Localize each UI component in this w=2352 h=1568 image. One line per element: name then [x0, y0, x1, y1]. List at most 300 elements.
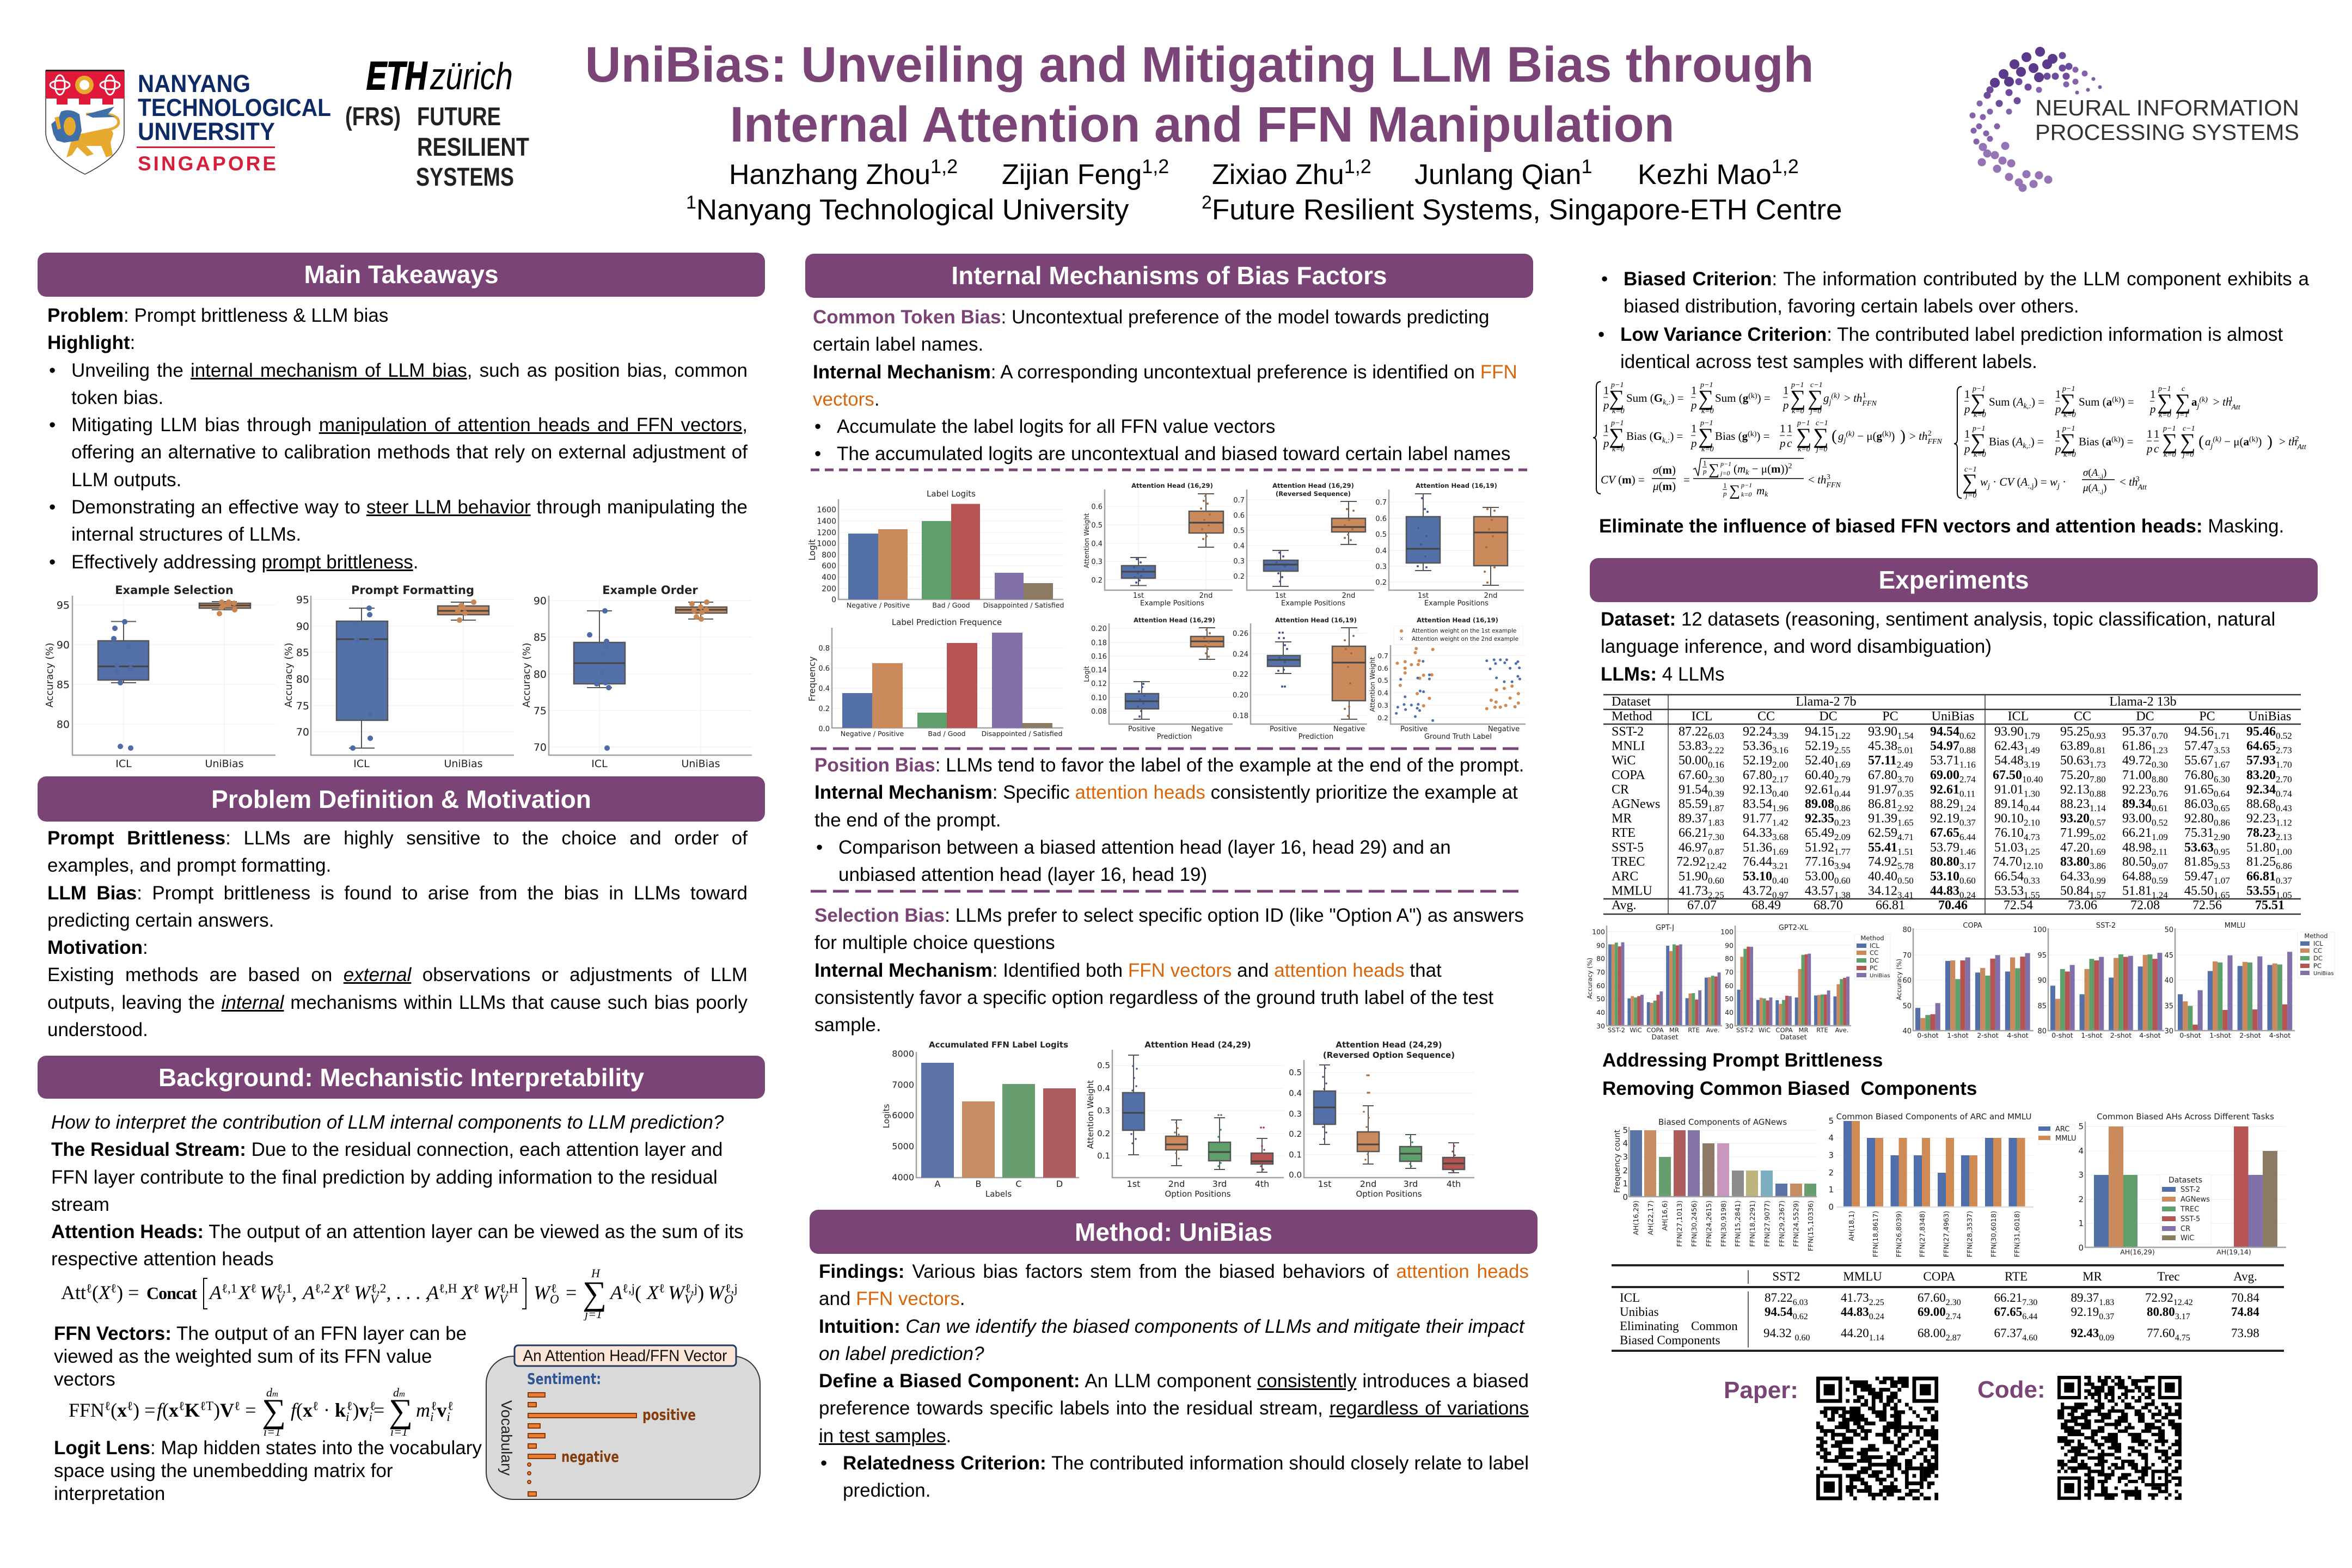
table: accuracy across datasets and methods: 1.65 [2214, 890, 2230, 901]
affiliations: 1 [686, 192, 696, 213]
table: removing common biased components: 4.75 [2175, 1333, 2190, 1343]
chart: Biased Components of AGNews: FFN(30,2456) [1690, 1200, 1698, 1247]
chart: Attention Head (16,19) prediction: 0.20 [1233, 691, 1248, 700]
diagram: attention head / FFN vector vocabulary bars: negative [561, 1448, 619, 1466]
equations: FFN vector criteria: 1 [1703, 459, 1706, 467]
legend: method colors, shots charts: DC [2313, 954, 2323, 962]
legend: method colors, shots charts: PC [2313, 962, 2322, 970]
equations: FFN vector criteria: > th [1909, 430, 1927, 443]
table: removing common biased components: 73.98 [2231, 1326, 2259, 1340]
chart: GPT2-XL accuracy bars: 50 [1725, 995, 1734, 1003]
table: accuracy across datasets and methods: COPA [1612, 768, 1645, 782]
table: accuracy across datasets and methods: 68.70 [1814, 898, 1843, 912]
chart: Common Biased Components of ARC and MMLU: FFN(27,4963) [1942, 1211, 1950, 1257]
diagram: attention head / FFN vector vocabulary bars: Sentiment: [527, 1370, 601, 1388]
equations: attention head criteria: j=1 [2176, 411, 2188, 419]
table: accuracy across datasets and methods: 62.43 [1994, 739, 2024, 754]
table: accuracy across datasets and methods: 3.17 [1959, 861, 1976, 871]
chart: Accumulated FFN Label Logits [881, 1040, 1079, 1199]
table: accuracy across datasets and methods: 95.37 [2122, 725, 2152, 739]
table: accuracy across datasets and methods: 50.00 [1679, 754, 1708, 768]
equation: attention layer decomposition: Att [61, 1282, 86, 1303]
table: accuracy across datasets and methods [1603, 695, 2301, 914]
chart: COPA shots bars: Accuracy (%) [1895, 959, 1903, 1000]
equation: attention layer decomposition: ℓ,H [500, 1282, 518, 1295]
table: removing common biased components: 0.09 [2099, 1333, 2114, 1343]
chart: Attention Head (16,19) example positions: Example Positions [1424, 599, 1489, 608]
table: accuracy across datasets and methods: 89.37 [1679, 811, 1708, 825]
chart: Common Biased Components of ARC and MMLU: 3 [1828, 1150, 1834, 1160]
equations: attention head criteria: w [2050, 475, 2057, 488]
chart: Accumulated FFN Label Logits: 8000 [892, 1049, 914, 1059]
text block: problem definition: predicting certain answers. [47, 910, 274, 931]
equations: FFN vector criteria: j [1842, 437, 1846, 445]
chart: GPT2-XL accuracy bars: Ave. [1835, 1026, 1848, 1034]
equations: attention head criteria: ∑ [2060, 389, 2076, 414]
chart: Label Prediction Frequence bars: Negative / Positive [841, 730, 904, 738]
chart: Attention Head (24,29) option positions: 3rd [1212, 1179, 1227, 1189]
equations: FFN vector criteria: p−1 [1791, 381, 1804, 389]
chart: Prompt Formatting boxplot: Prompt Formatting [351, 584, 474, 597]
icon: NeurIPS dot arc [1973, 52, 2100, 188]
table: accuracy across datasets and methods: 64.33 [1743, 826, 1772, 840]
chart: Accumulated FFN Label Logits: A [935, 1179, 941, 1189]
logo: Nanyang Technological University: NANYANG [138, 70, 250, 97]
table: accuracy across datasets and methods: 80.50 [2122, 855, 2152, 869]
chart: Label Logits bars: 1400 [817, 517, 836, 526]
chart: Attention Head (16,29) prediction logit: 0.16 [1091, 653, 1107, 661]
equations: FFN vector criteria: m [1756, 484, 1765, 497]
table: accuracy across datasets and methods: 0.59 [2152, 875, 2168, 886]
authors: 1 [1581, 155, 1592, 177]
table: accuracy across datasets and methods: 1.70 [2276, 759, 2292, 770]
table: accuracy across datasets and methods: 40.40 [1868, 869, 1897, 884]
table: accuracy across datasets and methods: 75.20 [2060, 768, 2090, 782]
chart: MMLU shots bars: 45 [2164, 952, 2173, 960]
chart: Attention Head (24,29) reversed option sequence: 3rd [1404, 1179, 1418, 1189]
table: accuracy across datasets and methods: 53.53 [1994, 884, 2024, 898]
chart: MMLU shots bars: 50 [2164, 926, 2173, 934]
logo: Nanyang Technological University: SINGAPORE [138, 152, 276, 175]
chart: Attention Head (16,29) prediction logit: Negative [1191, 725, 1223, 733]
chart: Label Prediction Frequence bars [807, 617, 1063, 738]
chart: Attention Head (16,29) reversed sequence: 1st [1275, 592, 1286, 600]
chart: Attention Head (24,29) option positions: 4th [1255, 1179, 1269, 1189]
text block: takeaways [47, 305, 748, 573]
text block: method findings and criteria: preference towards specific labels into the residual stream, regardless of variations [819, 1398, 1529, 1419]
equation: attention layer decomposition [61, 1266, 738, 1321]
chart: Attention Head (16,19) prediction: 0.22 [1233, 671, 1248, 679]
table: accuracy across datasets and methods: 51.03 [1994, 841, 2024, 855]
equations: FFN vector criteria: j=0 [1719, 469, 1730, 477]
table: accuracy across datasets and methods: 1.23 [2152, 745, 2168, 756]
table: accuracy across datasets and methods: 72.56 [2192, 898, 2222, 912]
equations: FFN vector criteria: ) [1891, 430, 1895, 443]
chart: Attention Head (16,19) example positions: 1st [1418, 592, 1429, 600]
table: accuracy across datasets and methods: 72.54 [2004, 898, 2033, 912]
equations: attention head criteria: Sum (A [1989, 395, 2024, 408]
legend: method colors, shots charts: CC [2313, 947, 2322, 954]
chart: GPT2-XL accuracy bars: RTE [1816, 1026, 1828, 1034]
chart: GPT-J accuracy bars: 40 [1596, 1008, 1605, 1016]
table: accuracy across datasets and methods: 2.17 [1772, 774, 1788, 785]
chart: COPA shots bars: 1-shot [1947, 1031, 1969, 1039]
chart: Attention Head (16,19) ground truth scatter: 0.5 [1377, 676, 1388, 684]
table: removing common biased components: 44.20 [1841, 1326, 1869, 1340]
chart: MMLU shots bars: 30 [2164, 1027, 2173, 1036]
equations: FFN vector criteria: 1 [1780, 422, 1786, 435]
text block: selection bias [814, 905, 1524, 1036]
equation: attention layer decomposition: j=1 [583, 1307, 602, 1321]
authors [729, 155, 1799, 191]
chart: Biased Components of AGNews: 5 [1622, 1125, 1628, 1135]
table: accuracy across datasets and methods: 67.80 [1868, 768, 1897, 782]
authors: Hanzhang Zhou [729, 159, 930, 191]
table: accuracy across datasets and methods: 53.10 [1930, 869, 1959, 884]
chart: Attention Head (16,29) prediction logit: 0.10 [1091, 694, 1107, 702]
chart: Biased Components of AGNews: FFN(27,9077) [1763, 1200, 1771, 1247]
equations: FFN vector criteria: ) = [1670, 391, 1684, 405]
chart: Attention Head (24,29) option positions: 0.3 [1097, 1106, 1110, 1116]
text block: position bias: unbiased attention head (layer 16, head 19) [838, 864, 1207, 885]
equations: FFN vector criteria: CV (m) = [1601, 473, 1645, 486]
equations: FFN vector criteria: = [1683, 473, 1690, 486]
equation: attention layer decomposition: ℓ,1 [222, 1282, 237, 1295]
equations: attention head criteria: ) = [2031, 435, 2044, 448]
chart: Prompt Formatting boxplot [283, 584, 514, 770]
equations: FFN vector criteria: k,: [1663, 399, 1670, 407]
equation: FFN layer decomposition: dm [393, 1386, 405, 1399]
equations: FFN vector criteria [1593, 381, 1943, 499]
table: removing common biased components: 44.83 [1841, 1305, 1869, 1319]
table: removing common biased components: MMLU [1843, 1270, 1882, 1283]
equation: attention layer decomposition: ∑ [583, 1275, 607, 1312]
table: accuracy across datasets and methods: 68.49 [1751, 898, 1781, 912]
chart: GPT2-XL accuracy bars: WiC [1759, 1026, 1771, 1034]
equation: FFN layer decomposition: K [185, 1399, 200, 1421]
chart: Attention Head (16,29) example positions: Attention Head (16,29) [1131, 482, 1213, 489]
chart: Example Selection boxplot: Example Selection [115, 584, 234, 597]
equations: attention head criteria: Bias (A [1989, 435, 2023, 448]
table: accuracy across datasets and methods: 93.00 [2122, 811, 2152, 825]
table: accuracy across datasets and methods: 1.83 [1708, 818, 1724, 828]
table: accuracy across datasets and methods: 0.81 [2090, 745, 2106, 756]
text block: position bias [814, 755, 1524, 885]
text block: residual stream and attention heads: The Residual Stream: Due to the residual connection, each attention layer and [51, 1139, 722, 1160]
chart: SST-2 shots bars: 80 [2037, 1027, 2047, 1036]
equations: FFN vector criteria: (k) [1748, 392, 1757, 400]
chart: GPT-J accuracy bars: COPA [1646, 1026, 1664, 1034]
table: accuracy across datasets and methods: 83.80 [2060, 855, 2090, 869]
chart: SST-2 shots bars: 85 [2037, 1002, 2047, 1010]
equation: attention layer decomposition: O [724, 1293, 733, 1306]
equations: attention head criteria: Att [2231, 403, 2241, 412]
equations: FFN vector criteria: j [1828, 399, 1832, 407]
table: accuracy across datasets and methods: 1.49 [2024, 745, 2040, 756]
table: accuracy across datasets and methods: 92.13 [1743, 783, 1772, 797]
table: accuracy across datasets and methods: 0.52 [2276, 731, 2292, 741]
chart: Attention Head (16,19) example positions: Attention Head (16,19) [1416, 482, 1497, 489]
text block: residual stream and attention heads: stream [51, 1194, 109, 1215]
heading: Experiments [1590, 558, 2318, 602]
table: accuracy across datasets and methods: 2.92 [1897, 803, 1914, 813]
chart: GPT2-XL accuracy bars: 40 [1725, 1008, 1734, 1016]
chart: Attention Head (16,29) reversed sequence: 0.5 [1233, 527, 1245, 535]
chart: Example Order boxplot: 80 [534, 669, 547, 681]
chart: GPT2-XL accuracy bars: 100 [1720, 928, 1734, 936]
text block: problem definition: outputs, leaving the internal mechanisms within LLMs that cause such bias poorly [47, 992, 748, 1013]
equations: attention head criteria: p−1 [2158, 385, 2171, 393]
table: accuracy across datasets and methods: 0.44 [1834, 788, 1851, 799]
chart: GPT2-XL accuracy bars: 70 [1725, 968, 1734, 976]
chart: Attention Head (16,29) prediction logit: Attention Head (16,29) [1134, 616, 1215, 624]
table: accuracy across datasets and methods: UniBias [1932, 709, 1974, 724]
chart: Accumulated FFN Label Logits: 7000 [892, 1080, 914, 1090]
table: accuracy across datasets and methods: 1.25 [2024, 847, 2040, 857]
equation: attention layer decomposition: , . . . , [386, 1282, 430, 1303]
heading: Background [38, 1056, 765, 1099]
table: removing common biased components: Common [1691, 1319, 1738, 1333]
table: accuracy across datasets and methods: 1.87 [1708, 803, 1724, 813]
table: accuracy across datasets and methods: 6.03 [1708, 731, 1724, 741]
text block: common token bias: The accumulated logits are uncontextual and biased toward certain label names [837, 443, 1510, 464]
equations: FFN vector criteria: k [1765, 491, 1768, 499]
table: accuracy across datasets and methods: 46.97 [1679, 841, 1708, 855]
diagram: attention head / FFN vector vocabulary bars: positive [642, 1406, 696, 1424]
text block: takeaways: token bias. [71, 387, 163, 408]
equations: attention head criteria: p−1 [2062, 425, 2075, 433]
equation: attention layer decomposition: ) = [117, 1282, 139, 1303]
table: accuracy across datasets and methods: 91.77 [1743, 811, 1772, 825]
equations: attention head criteria: ∑ [2175, 389, 2191, 414]
equations: FFN vector criteria: 1 [1603, 384, 1609, 397]
table: accuracy across datasets and methods: 1.71 [2214, 731, 2230, 741]
equations: attention head criteria: j [1987, 482, 1990, 491]
table: accuracy across datasets and methods: 1.77 [1834, 847, 1851, 857]
chart: GPT2-XL accuracy bars: 60 [1725, 982, 1734, 990]
chart: GPT2-XL accuracy bars: 80 [1725, 954, 1734, 963]
equations: FFN vector criteria: k=0 [1741, 491, 1751, 498]
table: accuracy across datasets and methods: 76.80 [2184, 768, 2214, 782]
equation: FFN layer decomposition: i [369, 1410, 372, 1424]
equation: FFN layer decomposition: = [240, 1399, 256, 1421]
table: removing common biased components: COPA [1923, 1270, 1956, 1283]
chart: Attention Head (24,29) option positions: Option Positions [1165, 1189, 1231, 1199]
text block: method findings and criteria: in test samples. [819, 1425, 951, 1447]
affiliations: Nanyang Technological University [696, 194, 1129, 226]
equations: FFN vector criteria: FFN [1927, 438, 1943, 446]
table: accuracy across datasets and methods: 0.86 [1834, 803, 1851, 813]
table: accuracy across datasets and methods: 92.23 [2122, 783, 2152, 797]
chart: Attention Head (16,19) example positions: 2nd [1484, 592, 1497, 600]
equations: FFN vector criteria: ∑ [1808, 385, 1823, 410]
chart: Common Biased Components of ARC and MMLU: 4 [1828, 1133, 1834, 1143]
table: removing common biased components: 80.80 [2147, 1305, 2175, 1319]
table: accuracy across datasets and methods: 66.54 [1994, 869, 2024, 884]
text block: common token bias: certain label names. [813, 334, 983, 355]
logo: Neural Information Processing Systems: NEURAL INFORMATION [2035, 95, 2299, 120]
heading: Addressing Prompt Brittleness: Addressing Prompt Brittleness [1602, 1050, 1883, 1071]
table: removing common biased components: 12.42 [2173, 1298, 2193, 1307]
heading: Internal Mechanisms of Bias Factors [805, 254, 1533, 298]
equation: FFN layer decomposition [69, 1386, 454, 1438]
table: accuracy across datasets and methods: 92.13 [2060, 783, 2090, 797]
heading: Main Takeaways: Main Takeaways [304, 260, 499, 289]
equation: FFN layer decomposition: i=1 [264, 1425, 281, 1438]
chart: GPT2-XL accuracy bars: COPA [1775, 1026, 1793, 1034]
chart: Attention Head (16,29) example positions: 0.3 [1091, 558, 1102, 566]
equations: attention head criteria: k=0 [2063, 451, 2076, 459]
chart: Example Selection boxplot: 85 [57, 679, 70, 691]
heading: Method: Method: UniBias [1075, 1218, 1272, 1246]
equation: FFN layer decomposition: v [437, 1399, 446, 1421]
chart: Label Prediction Frequence bars: Label Prediction Frequence [892, 617, 1002, 627]
chart: Label Logits bars: 400 [822, 573, 836, 582]
equation: attention layer decomposition: ℓ,H [439, 1282, 457, 1295]
table: accuracy across datasets and methods: 4.71 [1897, 832, 1914, 842]
table: removing common biased components: ICL [1620, 1291, 1640, 1304]
equation: FFN layer decomposition: FFN [69, 1399, 105, 1421]
chart: Attention Head (16,29) reversed sequence: 2nd [1342, 592, 1355, 600]
text block: problem definition: Existing methods are based on external observations or adjustments of LLM [47, 964, 748, 985]
equations: attention head criteria: (k) [2249, 436, 2258, 444]
chart: Example Selection boxplot [44, 584, 275, 770]
chart: Common Biased Components of ARC and MMLU: Common Biased Components of ARC and MMLU [1836, 1112, 2031, 1122]
table: accuracy across datasets and methods: 2.73 [2276, 745, 2292, 756]
table: accuracy across datasets and methods: 92.80 [2184, 811, 2214, 825]
table: accuracy across datasets and methods: 91.01 [1994, 783, 2024, 797]
equation: FFN layer decomposition: ℓ [313, 1399, 318, 1413]
equations: FFN vector criteria: p [1782, 399, 1789, 412]
equations: attention head criteria: c−1 [1964, 465, 1977, 474]
table: accuracy across datasets and methods: 1.16 [1959, 759, 1976, 770]
table: accuracy across datasets and methods: 34.12 [1868, 884, 1897, 898]
table: accuracy across datasets and methods: 0.60 [1959, 875, 1976, 886]
equations: attention head criteria: Att [2137, 483, 2147, 492]
chart: Label Logits bars: 1600 [817, 506, 836, 514]
text block: takeaways: Problem: Prompt brittleness & LLM bias [47, 305, 388, 326]
table: accuracy across datasets and methods: 53.79 [1930, 841, 1959, 855]
equations: FFN vector criteria: (k) [1846, 430, 1854, 438]
text block: problem definition [47, 828, 748, 1040]
table: accuracy across datasets and methods: 2.55 [1834, 745, 1851, 756]
authors: 1,2 [1772, 155, 1799, 177]
chart: Attention Head (24,29) reversed option sequence: 0.3 [1289, 1109, 1302, 1119]
table: accuracy across datasets and methods: 94.15 [1805, 725, 1834, 739]
equations: attention head criteria: k=0 [1974, 451, 1986, 459]
table: accuracy across datasets and methods: 2.90 [2214, 832, 2230, 842]
table: accuracy across datasets and methods: 48.98 [2122, 841, 2152, 855]
chart: GPT2-XL accuracy bars: 90 [1725, 941, 1734, 950]
equation: attention layer decomposition: ℓ [344, 1282, 350, 1295]
equations: attention head criteria [1954, 385, 2307, 500]
table: accuracy across datasets and methods: 91.97 [1868, 783, 1897, 797]
chart: GPT2-XL accuracy bars: SST-2 [1736, 1026, 1754, 1034]
equations: attention head criteria: ) [2267, 432, 2273, 450]
equations: attention head criteria: c [2182, 385, 2185, 393]
table: accuracy across datasets and methods: 0.64 [2214, 788, 2230, 799]
table: accuracy across datasets and methods: 1.73 [2090, 759, 2106, 770]
chart: Common Biased Components of ARC and MMLU: 2 [1828, 1168, 1834, 1178]
chart: Attention Head (24,29) reversed option sequence: 4th [1447, 1179, 1461, 1189]
chart: Attention Head (24,29) reversed option sequence: 0.4 [1289, 1088, 1302, 1098]
text block: position bias: Comparison between a biased attention head (layer 16, head 29) and an [838, 837, 1451, 858]
dashed divider three [811, 890, 1524, 893]
table: accuracy across datasets and methods: 0.60 [1708, 875, 1724, 886]
text block: problem definition: Prompt Brittleness: LLMs are highly sensitive to the choice and order of [47, 828, 748, 849]
chart: Attention Head (16,19) prediction: 0.24 [1233, 651, 1248, 659]
chart: Attention Head (16,29) reversed sequence [1233, 482, 1374, 608]
table: accuracy across datasets and methods: 91.65 [2184, 783, 2214, 797]
table: accuracy across datasets and methods: 1.69 [1834, 759, 1851, 770]
text block: datasets and LLMs: Dataset: 12 datasets (reasoning, sentiment analysis, topic classification, natural [1601, 609, 2275, 630]
table: accuracy across datasets and methods: 89.34 [2122, 797, 2152, 811]
chart: Attention Head (16,19) example positions: 0.2 [1375, 579, 1387, 587]
equation: attention layer decomposition: V [276, 1293, 285, 1306]
equations: attention head criteria: a [2205, 435, 2210, 448]
chart: Attention Head (16,19) prediction: 0.26 [1233, 630, 1248, 638]
table: accuracy across datasets and methods: 0.44 [2024, 803, 2040, 813]
chart: Example Selection boxplot: 90 [57, 639, 70, 651]
equations: FFN vector criteria: Bias (g [1715, 430, 1748, 443]
chart: Attention Head (24,29) reversed option sequence: 1st [1318, 1179, 1331, 1189]
text block: biased criterion: Biased Criterion: The information contributed by the LLM component exhibits a [1624, 268, 2309, 290]
equation: attention layer decomposition: W [354, 1282, 372, 1303]
table: accuracy across datasets and methods: 9.53 [2214, 861, 2230, 871]
text block: low variance criterion: identical across test samples with different labels. [1620, 351, 2037, 372]
table: removing common biased components: SST2 [1772, 1270, 1800, 1283]
table: accuracy across datasets and methods: 76.10 [1994, 826, 2024, 840]
table: accuracy across datasets and methods: 6.86 [2276, 861, 2292, 871]
table: accuracy across datasets and methods: 71.99 [2060, 826, 2090, 840]
table: accuracy across datasets and methods: 0.60 [1834, 875, 1851, 886]
equations: attention head criteria: p [1963, 402, 1970, 415]
table: accuracy across datasets and methods: Avg. [1612, 898, 1637, 912]
chart: SST-2 shots bars [2033, 922, 2164, 1039]
equation: FFN layer decomposition: ℓ [431, 1399, 437, 1413]
text block: datasets and LLMs [1601, 606, 2310, 688]
chart: Label Logits bars: 600 [822, 562, 836, 571]
table: accuracy across datasets and methods: SST-5 [1612, 841, 1644, 855]
chart: Accumulated FFN Label Logits: C [1015, 1179, 1022, 1189]
heading: Problem Definition & Motivation: Problem Definition & Motivation [211, 785, 591, 813]
equations: attention head criteria: p−1 [2163, 425, 2176, 433]
table: accuracy across datasets and methods: 0.97 [1772, 890, 1788, 901]
equation: FFN layer decomposition: v [359, 1399, 369, 1421]
chart: Example Selection boxplot: UniBias [205, 758, 244, 770]
text block: datasets and LLMs: language inference, and word disambiguation) [1601, 636, 1992, 657]
table: accuracy across datasets and methods: 62.59 [1868, 826, 1897, 840]
chart: Attention Head (16,19) ground truth scatter: Attention Head (16,19) [1417, 616, 1498, 624]
table: accuracy across datasets and methods: 51.92 [1805, 841, 1834, 855]
table: accuracy across datasets and methods: 2.30 [1708, 774, 1724, 785]
chart: Attention Head (24,29) reversed option sequence: Option Positions [1356, 1189, 1422, 1199]
legend: scatter markers: x [1400, 635, 1404, 642]
table: accuracy across datasets and methods: 0.87 [1708, 847, 1724, 857]
table: accuracy across datasets and methods: 3.21 [1772, 861, 1788, 871]
equation: attention layer decomposition: V [684, 1293, 694, 1306]
table: accuracy across datasets and methods: 92.35 [1805, 811, 1834, 825]
equation: attention layer decomposition: ℓ,1 [277, 1282, 292, 1295]
chart: COPA shots bars: 4-shot [2007, 1031, 2029, 1039]
table: accuracy across datasets and methods: 72.08 [2130, 898, 2160, 912]
bars: vocabulary projection [528, 1393, 636, 1496]
chart: Common Biased AHs Across Different Tasks: 3 [2078, 1170, 2084, 1180]
label: Code: Code: [1977, 1376, 2045, 1403]
chart: Common Biased Components of ARC and MMLU: FFN(31,6018) [2013, 1211, 2021, 1257]
table: accuracy across datasets and methods: 75.51 [2255, 898, 2284, 912]
equations: attention head criteria: p−1 [1972, 425, 1985, 433]
